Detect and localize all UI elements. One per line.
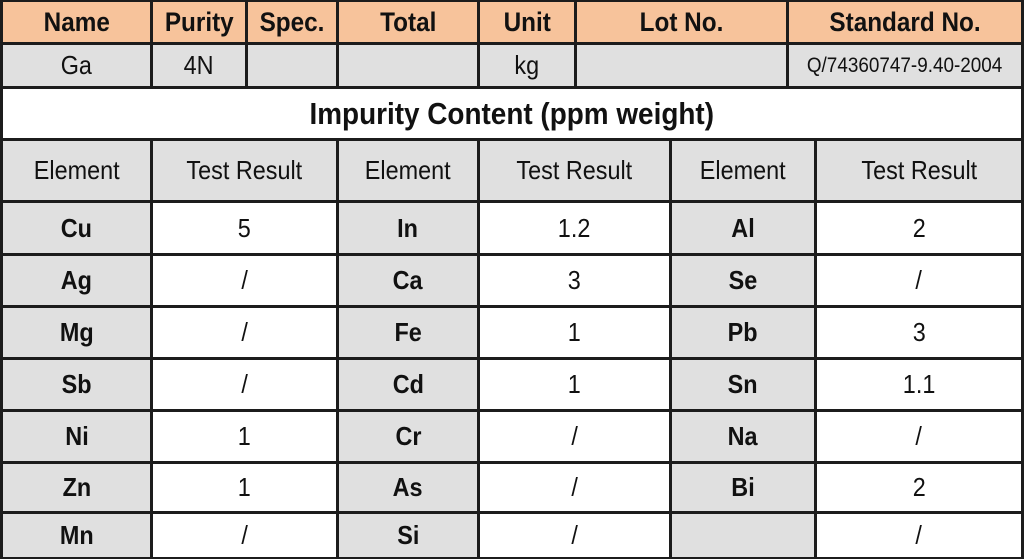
impurity grid: As: [393, 472, 423, 502]
impurity grid: Bi: [731, 472, 755, 502]
title: [3, 89, 1021, 138]
impurity grid: Cu: [61, 212, 92, 242]
impurity grid: Element: [34, 155, 119, 185]
impurity grid: /: [916, 520, 922, 550]
header block: Lot No.: [640, 6, 723, 36]
impurity grid: Ni: [65, 421, 88, 451]
impurity grid: 1: [238, 421, 251, 451]
impurity grid: Element: [365, 155, 451, 185]
header block: [3, 2, 1021, 86]
impurity grid: 3: [912, 317, 926, 347]
impurity grid: 5: [238, 212, 251, 242]
impurity grid: Test Result: [187, 155, 302, 185]
impurity grid: 1: [568, 369, 581, 399]
impurity grid: /: [241, 520, 248, 550]
impurity grid: Ca: [393, 265, 423, 295]
header block: Unit: [503, 6, 551, 36]
header block: Purity: [165, 6, 233, 36]
impurity grid: Si: [397, 520, 419, 550]
impurity grid: Sb: [62, 369, 91, 399]
header block: Ga: [61, 50, 92, 80]
header block: Spec.: [260, 6, 324, 36]
impurity grid: [3, 141, 1021, 557]
impurity grid: 2: [912, 212, 926, 242]
impurity grid: Cr: [395, 421, 421, 451]
impurity grid: Fe: [394, 317, 422, 347]
header block: Standard No.: [829, 6, 981, 36]
impurity grid: Pb: [728, 317, 758, 347]
impurity grid: 1: [568, 317, 581, 347]
impurity grid: Sn: [728, 369, 758, 399]
impurity grid: Al: [731, 212, 755, 242]
impurity grid: /: [241, 317, 248, 347]
impurity grid: Na: [728, 421, 758, 451]
impurity grid: /: [241, 369, 248, 399]
impurity grid: /: [571, 472, 578, 502]
header block: Name: [43, 6, 110, 36]
impurity grid: /: [241, 265, 248, 295]
impurity grid: Ag: [61, 265, 92, 295]
impurity grid: 2: [912, 472, 926, 502]
impurity grid: 1.1: [903, 369, 935, 399]
header block: kg: [515, 50, 539, 80]
impurity grid: Test Result: [517, 155, 632, 185]
title: Impurity Content (ppm weight): [310, 96, 714, 130]
header block: 4N: [184, 50, 214, 80]
impurity grid: Cd: [392, 369, 424, 399]
header block: Total: [380, 6, 436, 36]
impurity grid: 1: [238, 472, 251, 502]
impurity grid: Zn: [62, 472, 91, 502]
impurity grid: /: [916, 265, 922, 295]
header block: Q/74360747-9.40-2004: [807, 54, 1003, 76]
impurity grid: /: [571, 520, 578, 550]
impurity grid: 3: [568, 265, 581, 295]
impurity grid: Mn: [60, 520, 93, 550]
impurity grid: /: [571, 421, 578, 451]
impurity grid: Se: [729, 265, 757, 295]
impurity grid: Element: [700, 155, 786, 185]
impurity grid: In: [398, 212, 418, 242]
impurity grid: 1.2: [558, 212, 591, 242]
impurity grid: /: [916, 421, 922, 451]
impurity grid: Mg: [60, 317, 93, 347]
impurity grid: Test Result: [861, 155, 977, 185]
